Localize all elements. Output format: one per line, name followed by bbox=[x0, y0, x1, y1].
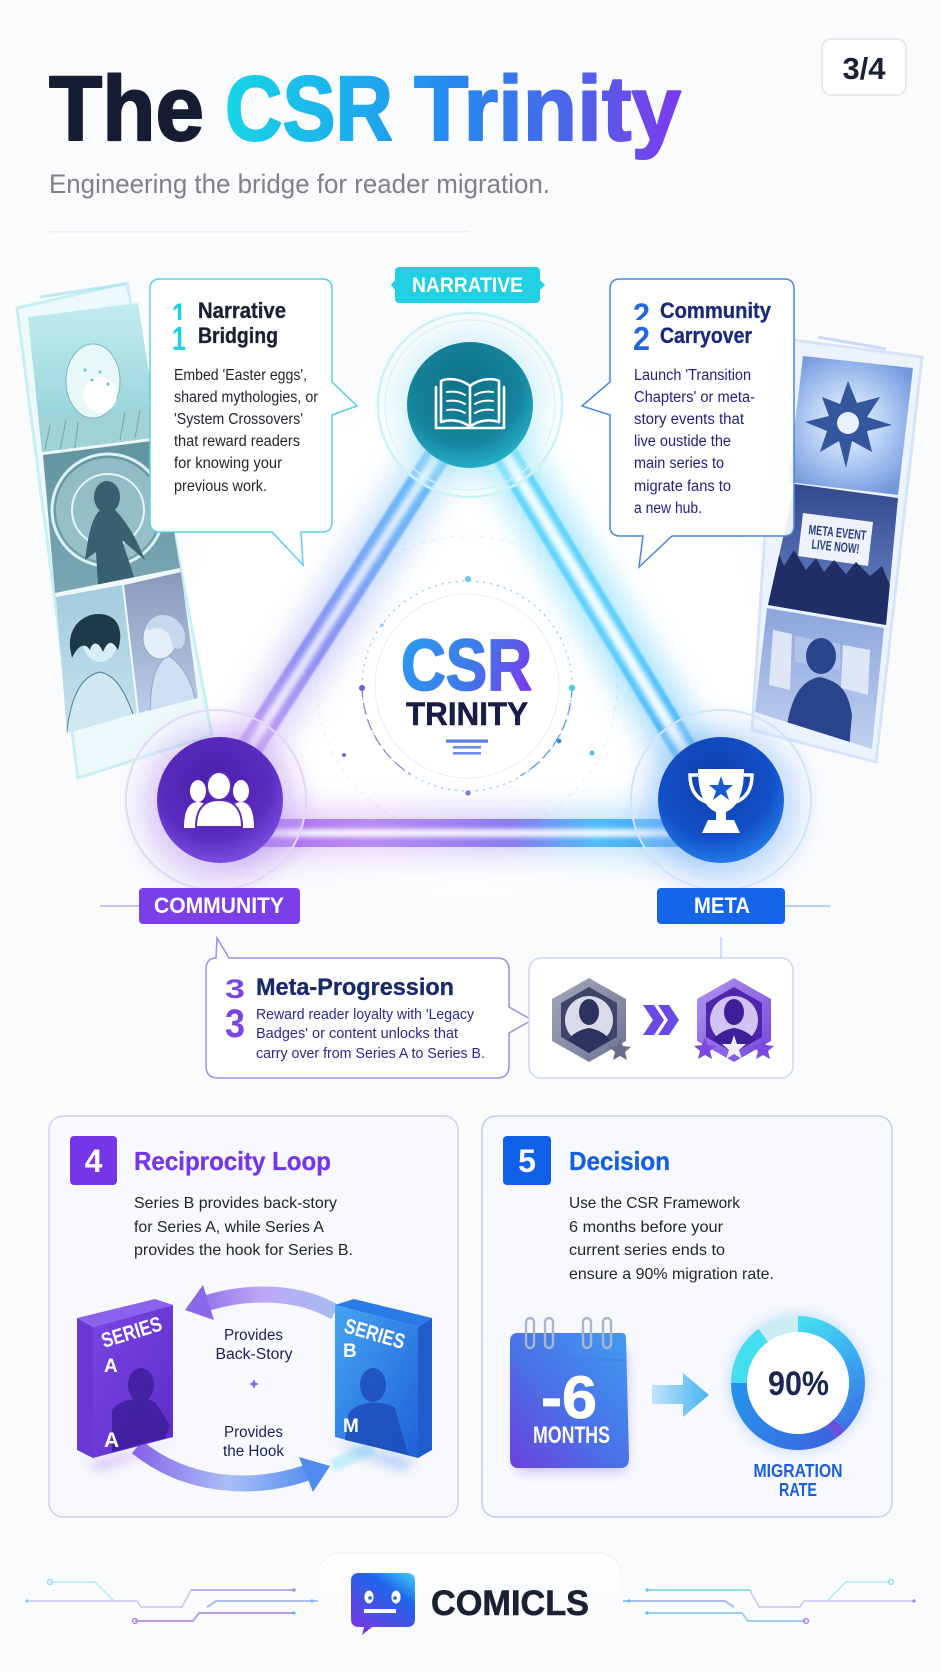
body text bbox=[134, 1195, 353, 1259]
number 2: 2 bbox=[633, 320, 650, 357]
footer logo: comicls: COMICLS bbox=[431, 1584, 589, 1623]
title: CSR bbox=[225, 58, 393, 160]
icon: calendar: MONTHS bbox=[533, 1422, 610, 1449]
body text: 6 months before your bbox=[569, 1219, 724, 1236]
callout 2: community carryover bbox=[582, 279, 794, 567]
heading bbox=[198, 298, 286, 348]
body text: Chapters' or meta- bbox=[634, 389, 755, 406]
number 3: 3 bbox=[225, 974, 245, 1004]
book: series B: SERIES bbox=[342, 1315, 408, 1354]
arrow labels: Back-Story bbox=[216, 1346, 293, 1363]
donut chart: 90%: 90% bbox=[768, 1365, 829, 1403]
panel: badge upgrade bbox=[529, 958, 793, 1078]
book: series A: A bbox=[104, 1356, 118, 1377]
number badge 4: 4 bbox=[85, 1143, 103, 1179]
icon: calendar: -6 bbox=[541, 1364, 597, 1431]
node: meta bbox=[631, 710, 811, 890]
label: meta: META bbox=[694, 893, 750, 918]
arrow: back-story bbox=[185, 1285, 335, 1320]
arrow labels: the Hook bbox=[223, 1443, 284, 1460]
book: series B: M bbox=[343, 1416, 359, 1437]
title: Trinity bbox=[414, 58, 681, 160]
footer circuit lines: right bbox=[623, 1580, 916, 1623]
heading: Decision bbox=[569, 1146, 670, 1176]
center rings bbox=[317, 536, 617, 836]
comic panel: meta event bbox=[768, 484, 898, 625]
body text: main series to bbox=[634, 455, 724, 472]
body text: Series B provides back-story bbox=[134, 1195, 337, 1212]
comic panel: silhouette with magic circle bbox=[43, 441, 180, 593]
panel 4: reciprocity loop bbox=[49, 1116, 458, 1517]
comic panel: meta event: META EVENT bbox=[808, 522, 868, 543]
arrow: hook bbox=[137, 1447, 373, 1492]
book: series A: SERIES bbox=[99, 1313, 165, 1353]
panel: meta-progression bbox=[206, 938, 532, 1078]
comic strip: left bbox=[17, 283, 212, 778]
center title: CSR Trinity: CSR bbox=[401, 626, 532, 706]
book: series A: A bbox=[104, 1429, 119, 1452]
node: community bbox=[126, 710, 306, 890]
body text: that reward readers bbox=[174, 433, 300, 450]
label: community bbox=[100, 888, 300, 924]
center title: CSR Trinity: TRINITY bbox=[406, 696, 528, 732]
number 1: 1 bbox=[172, 320, 186, 357]
number 3: 3 bbox=[225, 1002, 245, 1046]
glow background behind triangle bbox=[170, 390, 770, 890]
callout 1: narrative bridging bbox=[150, 279, 357, 565]
arrow labels: Provides bbox=[224, 1327, 283, 1344]
panel 5: decision bbox=[482, 1116, 892, 1517]
book: series B bbox=[335, 1299, 432, 1470]
body text bbox=[569, 1195, 774, 1283]
donut chart: 90%: MIGRATION bbox=[754, 1461, 842, 1481]
page badge: 3/4: 3/4 bbox=[842, 51, 886, 86]
body text: previous work. bbox=[174, 478, 267, 495]
body text: Embed 'Easter eggs', bbox=[174, 367, 307, 384]
icon: silver badge bbox=[552, 978, 631, 1062]
number badge 5 bbox=[503, 1136, 551, 1185]
number 2 bbox=[634, 303, 649, 350]
icon: purple badge bbox=[694, 978, 774, 1062]
body text: Use the CSR Framework bbox=[569, 1195, 741, 1212]
node: narrative bbox=[378, 313, 562, 497]
page badge: 3/4 bbox=[822, 39, 906, 95]
arrow labels bbox=[216, 1327, 293, 1460]
arrow bbox=[652, 1373, 709, 1417]
book: series B: B bbox=[343, 1341, 357, 1362]
title bbox=[49, 58, 681, 160]
subtitle: Engineering the bridge for reader migration. bbox=[49, 169, 550, 199]
comic panel: egg bbox=[28, 303, 150, 452]
number badge 5: 5 bbox=[518, 1143, 536, 1179]
comic panel: meta event: LIVE NOW! bbox=[811, 537, 860, 556]
donut chart: 90%: RATE bbox=[779, 1480, 817, 1500]
body text: for Series A, while Series A bbox=[134, 1219, 324, 1236]
body text: Launch 'Transition bbox=[634, 367, 751, 384]
comic panel: girl bbox=[124, 572, 198, 713]
body text: for knowing your bbox=[174, 455, 282, 472]
icon: people bbox=[184, 772, 254, 828]
body text: story events that bbox=[634, 411, 745, 428]
number 1: 1 bbox=[172, 297, 186, 333]
label: narrative: NARRATIVE bbox=[412, 274, 523, 297]
center title: CSR Trinity bbox=[401, 626, 532, 755]
comic panel: boy bbox=[56, 585, 137, 733]
icon: chat robot face bbox=[351, 1573, 415, 1635]
title: The bbox=[49, 58, 204, 160]
body text bbox=[634, 367, 755, 517]
body text: Badges' or content unlocks that bbox=[256, 1025, 459, 1042]
label: narrative bbox=[391, 267, 545, 303]
body text: live oustide the bbox=[634, 433, 731, 450]
donut chart: 90% bbox=[728, 1313, 868, 1500]
body text: migrate fans to bbox=[634, 478, 731, 495]
body text: shared mythologies, or bbox=[174, 389, 318, 406]
heading: Narrative bbox=[198, 298, 286, 323]
footer logo: comicls bbox=[318, 1553, 621, 1653]
body text bbox=[256, 1006, 485, 1062]
icon: trophy bbox=[690, 769, 752, 833]
body text: a new hub. bbox=[634, 500, 702, 517]
heading: Meta-Progression bbox=[256, 974, 454, 1001]
comic panel: starburst bbox=[788, 356, 913, 495]
number 3 bbox=[225, 974, 245, 1046]
comic strip: right bbox=[750, 337, 922, 762]
footer circuit lines: left bbox=[25, 1580, 318, 1623]
label: community: COMMUNITY bbox=[154, 893, 284, 918]
comic panel: figure at screens bbox=[755, 608, 884, 749]
body text: Reward reader loyalty with 'Legacy bbox=[256, 1006, 474, 1023]
body text bbox=[174, 367, 318, 495]
number badge 4 bbox=[70, 1136, 117, 1185]
number 1 bbox=[174, 304, 186, 350]
icon: double chevron bbox=[643, 1005, 679, 1035]
body text: 'System Crossovers' bbox=[174, 411, 303, 428]
body text: current series ends to bbox=[569, 1242, 725, 1259]
number 2: 2 bbox=[633, 297, 650, 333]
label: meta bbox=[657, 888, 830, 924]
body text: carry over from Series A to Series B. bbox=[256, 1045, 485, 1062]
icon: open book bbox=[436, 379, 504, 428]
heading: Community bbox=[660, 298, 772, 323]
heading: Reciprocity Loop bbox=[134, 1146, 331, 1176]
book: series A bbox=[77, 1299, 177, 1470]
body text: provides the hook for Series B. bbox=[134, 1242, 353, 1259]
heading: Carryover bbox=[660, 323, 752, 348]
heading: Bridging bbox=[198, 323, 278, 348]
triangle connecting beams bbox=[216, 405, 721, 833]
heading bbox=[660, 298, 772, 348]
body text: ensure a 90% migration rate. bbox=[569, 1266, 774, 1283]
icon: calendar bbox=[510, 1318, 629, 1472]
arrow labels: Provides bbox=[224, 1424, 283, 1441]
